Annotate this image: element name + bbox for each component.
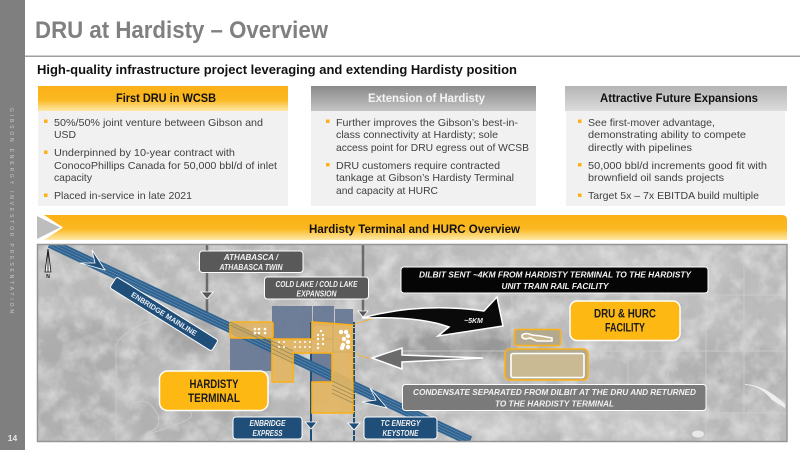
panel: Attractive Future Expansions: 50,000 bbl/d increments good fit with — [588, 161, 767, 172]
blue land parcels — [230, 306, 353, 383]
label: Enbridge Mainline: ENBRIDGE MAINLINE — [129, 290, 199, 338]
panel: Extension of Hardisty: Extension of Hardisty — [368, 93, 486, 105]
panel: First DRU in WCSB: Underpinned by 10-year contract with — [54, 148, 235, 159]
pipeline: TC Energy Keystone — [353, 322, 355, 441]
Enbridge mainline band — [50, 240, 470, 444]
thin orange connectors — [352, 318, 374, 358]
section banner: Hardisty Terminal and HURC Overview — [309, 224, 520, 236]
callout: condensate separated: TO THE HARDISTY TERMINAL — [495, 400, 614, 408]
panel header — [565, 86, 787, 111]
label: Cold Lake: EXPANSION — [296, 290, 337, 298]
panel: First DRU in WCSB: ConocoPhillips Canada for 50,000 bbl/d of inlet — [54, 161, 277, 172]
panel: Extension of Hardisty: Further improves the Gibson’s best-in- — [336, 118, 518, 129]
panel: First DRU in WCSB: 50%/50% joint venture between Gibson and — [54, 118, 263, 129]
label: Enbridge Mainline — [110, 277, 218, 351]
callout: DRU and HURC facility — [570, 301, 680, 340]
panel: Extension of Hardisty: class connectivity at Hardisty; sole — [336, 130, 498, 141]
label: Enbridge Express: EXPRESS — [252, 429, 283, 438]
arrow: condensate return — [372, 348, 483, 369]
arrow: dilbit to rail, about 5 km — [362, 297, 503, 336]
callout: Hardisty Terminal: HARDISTY — [190, 379, 239, 391]
panel: Extension of Hardisty: tankage at Gibson’s Hardisty Terminal — [336, 173, 514, 184]
label: Enbridge Express: ENBRIDGE — [250, 419, 286, 428]
label: TC Energy Keystone — [364, 417, 437, 439]
subtitle: High-quality infrastructure project leveraging and extending Hardisty position — [37, 62, 517, 77]
sidebar — [0, 0, 25, 450]
section banner — [37, 215, 787, 240]
field grid — [116, 245, 787, 441]
callout: DRU and HURC facility: FACILITY — [605, 322, 645, 334]
north arrow: N — [46, 274, 50, 280]
callout: dilbit sent — [401, 267, 708, 293]
panel: Extension of Hardisty: and capacity at HURC — [336, 186, 438, 197]
callout: dilbit sent: DILBIT SENT ~4KM FROM HARDISTY TERMINAL TO THE HARDISTY — [419, 270, 692, 280]
label: Enbridge Express — [233, 417, 302, 439]
white lake feature — [745, 384, 785, 408]
panel: Attractive Future Expansions: Target 5x – 7x EBITDA build multiple — [588, 191, 759, 202]
callout: Hardisty Terminal: TERMINAL — [188, 393, 240, 405]
banner chevron — [37, 215, 63, 240]
panel header — [311, 86, 536, 111]
panel: Extension of Hardisty: access point for DRU egress out of WCSB — [336, 143, 529, 154]
pipeline: Cold Lake — [362, 245, 364, 315]
callout: Hardisty Terminal — [160, 371, 268, 410]
blue flow arrow, top — [80, 250, 105, 270]
DRU site outline — [514, 330, 560, 346]
label: Athabasca: ATHABASCA / — [223, 253, 279, 262]
panel: Extension of Hardisty: DRU customers require contracted — [336, 161, 500, 172]
panel header — [38, 86, 288, 111]
label: Athabasca — [200, 251, 303, 272]
panel: First DRU in WCSB: capacity — [54, 173, 93, 184]
label: Cold Lake: COLD LAKE / COLD LAKE — [276, 280, 358, 289]
terminal lands — [230, 322, 353, 413]
panel: Attractive Future Expansions: See first-mover advantage, — [588, 118, 715, 129]
title: DRU at Hardisty – Overview — [35, 17, 328, 44]
panel: Attractive Future Expansions: directly with pipelines — [588, 143, 692, 154]
storage tanks — [254, 328, 350, 350]
callout: DRU and HURC facility: DRU & HURC — [594, 308, 656, 320]
sidebar vertical caption: GIBSON ENERGY INVESTOR PRESENTATION — [8, 108, 14, 313]
arrow: dilbit to rail, about 5 km: ~5KM — [464, 318, 483, 325]
label: TC Energy Keystone: KEYSTONE — [382, 429, 419, 438]
page number: 14 — [8, 433, 17, 443]
label: TC Energy Keystone: TC ENERGY — [380, 419, 421, 428]
chevrons on pipelines — [201, 292, 368, 430]
pipeline: Enbridge Express — [310, 322, 312, 441]
panel: First DRU in WCSB: USD — [54, 130, 76, 141]
north arrow — [45, 249, 51, 280]
label: Cold Lake — [264, 277, 368, 299]
panel: Extension of Hardisty — [311, 86, 536, 206]
callout: dilbit sent: UNIT TRAIN RAIL FACILITY — [502, 282, 609, 291]
stripes over lands — [230, 322, 353, 403]
panel: Attractive Future Expansions: brownfield oil sands projects — [588, 173, 724, 184]
pipeline: Athabasca — [206, 245, 208, 313]
panel: First DRU in WCSB: Placed in-service in late 2021 — [54, 191, 192, 202]
panel: First DRU in WCSB — [38, 86, 288, 206]
panel: Attractive Future Expansions: demonstrating ability to compete — [588, 130, 746, 141]
map — [25, 240, 790, 444]
callout: condensate separated — [402, 384, 706, 410]
callout: condensate separated: CONDENSATE SEPARATED FROM DILBIT AT THE DRU AND RETURNED — [413, 388, 696, 397]
blue flow arrow, bottom — [362, 388, 387, 408]
panel: Attractive Future Expansions: Attractive Future Expansions — [600, 93, 758, 105]
panel: First DRU in WCSB: First DRU in WCSB — [116, 93, 216, 105]
label: Athabasca: ATHABASCA TWIN — [219, 263, 283, 272]
panel: Attractive Future Expansions — [565, 86, 787, 206]
HURC site outline — [505, 349, 588, 380]
